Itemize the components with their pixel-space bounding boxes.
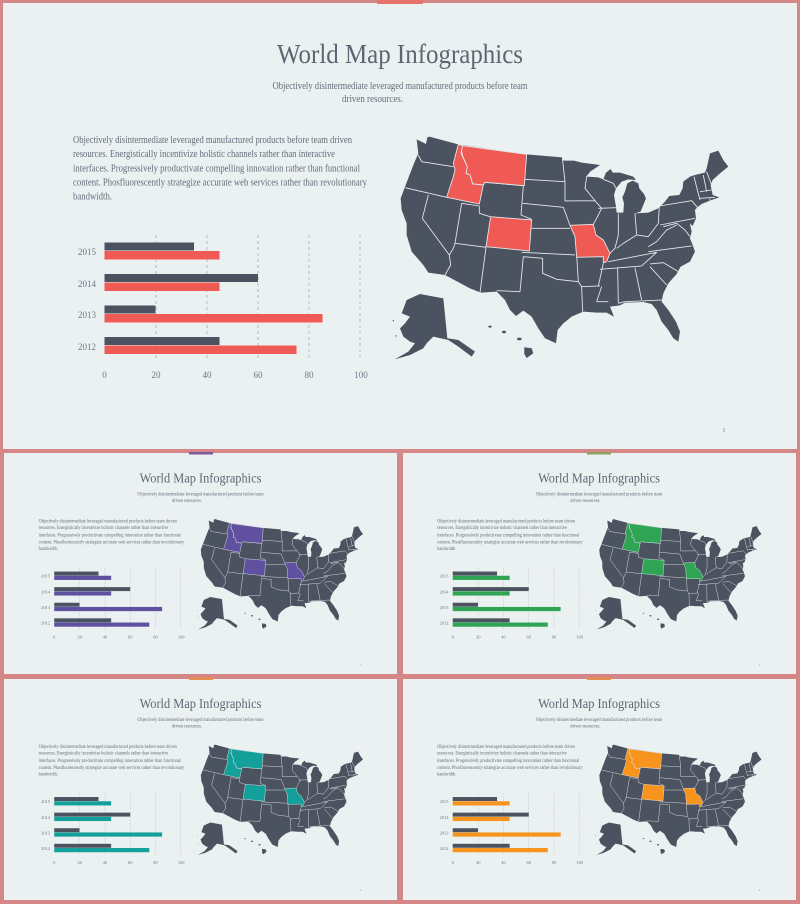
bar chart: 80	[552, 635, 557, 640]
subtitle: Objectively disintermediate leveraged manufactured products before team	[536, 491, 663, 498]
body text: Objectively disintermediate leveraged manufactured products before team driven	[437, 743, 575, 750]
subtitle: Objectively disintermediate leveraged manufactured products before team	[272, 80, 528, 92]
page number: 1	[360, 662, 362, 666]
title: World Map Infographics	[277, 39, 523, 69]
title: World Map Infographics	[538, 696, 660, 711]
bar chart: 2014	[78, 279, 96, 289]
bar chart: 20	[78, 860, 83, 865]
bar chart: 40	[103, 860, 108, 865]
body text: Objectively disintermediate leveraged manufactured products before team driven	[73, 134, 352, 146]
subtitle: driven resources.	[570, 498, 600, 504]
bar chart: 0	[452, 635, 455, 640]
bar chart: 2012	[41, 846, 50, 851]
bar chart: 60	[128, 635, 133, 640]
bar chart: 2013	[41, 830, 51, 835]
body text: interfaces. Progressively productivate compelling innovation rather than functional	[73, 162, 360, 174]
body text: content. Phosfluorescently strategize accurate web services rather than revolutionary	[39, 764, 184, 771]
bar chart: 60	[526, 635, 532, 640]
bar chart: 2013	[440, 605, 449, 610]
body text: bandwidth.	[437, 546, 456, 552]
bar chart: 2014	[440, 815, 449, 820]
US map	[595, 745, 762, 855]
bar chart: 100	[178, 635, 185, 640]
bar chart: 2014	[41, 815, 51, 820]
accent tab	[189, 678, 213, 680]
bar chart: 2015	[41, 574, 51, 579]
bar chart: 0	[53, 860, 56, 865]
panel: slide purple	[4, 452, 397, 674]
body text	[437, 517, 583, 552]
subtitle: driven resources.	[342, 93, 403, 105]
bar chart: 2012	[78, 342, 96, 352]
subtitle	[536, 716, 663, 729]
accent tab	[587, 452, 611, 454]
body text: interfaces. Progressively productivate compelling innovation rather than functional	[437, 757, 580, 764]
bar chart: 2012	[440, 621, 449, 626]
body text: interfaces. Progressively productivate compelling innovation rather than functional	[437, 531, 580, 538]
bar chart: 40	[103, 635, 108, 640]
body text: resources. Energistically incentivize holistic channels rather than interactive	[39, 751, 169, 757]
accent tab	[189, 452, 213, 454]
body text: interfaces. Progressively productivate compelling innovation rather than functional	[39, 757, 181, 764]
bar chart: 100	[576, 860, 584, 865]
body text: content. Phosfluorescently strategize accurate web services rather than revolutionary	[437, 538, 583, 545]
title: World Map Infographics	[538, 471, 660, 486]
bar chart: 40	[501, 635, 506, 640]
panel: slide teal	[4, 678, 397, 900]
body text: resources. Energistically incentivize holistic channels rather than interactive	[437, 751, 567, 757]
page number: 1	[759, 662, 761, 666]
bar chart: 2013	[440, 830, 449, 835]
bar chart: 2014	[41, 590, 51, 595]
body text: resources. Energistically incentivize holistic channels rather than interactive	[437, 525, 567, 531]
bar chart: 80	[153, 860, 158, 865]
bar chart: 20	[476, 635, 481, 640]
body text: content. Phosfluorescently strategize accurate web services rather than revolutionary	[39, 538, 184, 545]
accent tab	[377, 0, 423, 4]
title: World Map Infographics	[140, 696, 261, 711]
body text: interfaces. Progressively productivate compelling innovation rather than functional	[39, 531, 181, 538]
bar chart: 60	[526, 860, 532, 865]
subtitle: Objectively disintermediate leveraged manufactured products before team	[137, 716, 264, 723]
panel: main slide red	[3, 0, 797, 449]
US map	[197, 745, 363, 855]
body text: Objectively disintermediate leveraged manufactured products before team driven	[39, 743, 177, 750]
US map	[595, 519, 762, 629]
bar chart: 0	[452, 860, 455, 865]
page number: 1	[759, 888, 761, 892]
body text: content. Phosfluorescently strategize accurate web services rather than revolutionary	[73, 176, 367, 188]
accent tab	[587, 678, 611, 680]
bar chart: 80	[304, 370, 314, 380]
body text	[437, 743, 583, 778]
subtitle: driven resources.	[570, 723, 600, 729]
bar chart	[440, 568, 584, 640]
bar chart: 2012	[440, 846, 449, 851]
US map	[197, 519, 363, 629]
panel: slide green	[403, 452, 796, 674]
bar chart: 80	[153, 635, 158, 640]
bar chart: 2015	[440, 574, 449, 579]
subtitle	[272, 80, 528, 105]
bar chart: 80	[552, 860, 557, 865]
bar chart: 2013	[78, 310, 96, 320]
body text: resources. Energistically incentivize holistic channels rather than interactive	[39, 525, 169, 531]
body text	[39, 743, 184, 778]
panel: slide orange	[403, 678, 796, 900]
body text: resources. Energistically incentivize holistic channels rather than interactive	[73, 148, 335, 160]
subtitle	[137, 716, 264, 729]
bar chart	[41, 793, 185, 865]
bar chart: 2015	[440, 799, 449, 804]
body text: bandwidth.	[437, 772, 456, 778]
bar chart: 100	[178, 860, 185, 865]
body text: bandwidth.	[39, 546, 58, 552]
subtitle: Objectively disintermediate leveraged manufactured products before team	[536, 716, 663, 723]
page number: 1	[722, 428, 726, 434]
subtitle: driven resources.	[172, 498, 202, 504]
bar chart: 40	[501, 860, 506, 865]
bar chart: 2015	[41, 799, 51, 804]
bar chart	[440, 793, 584, 865]
body text	[39, 517, 184, 552]
bar chart: 2015	[78, 247, 96, 257]
body text	[73, 134, 367, 202]
bar chart: 20	[476, 860, 481, 865]
bar chart	[41, 568, 185, 640]
bar chart: 0	[102, 370, 107, 380]
bar chart: 100	[576, 635, 584, 640]
bar chart: 60	[254, 370, 263, 380]
bar chart: 60	[128, 860, 133, 865]
bar chart: 100	[354, 370, 368, 380]
bar chart: 0	[53, 635, 56, 640]
bar chart: 2012	[41, 621, 50, 626]
subtitle: driven resources.	[172, 723, 202, 729]
body text: Objectively disintermediate leveraged manufactured products before team driven	[437, 517, 575, 524]
body text: bandwidth.	[73, 190, 112, 202]
bar chart: 20	[152, 370, 161, 380]
bar chart	[78, 235, 368, 380]
bar chart: 2013	[41, 605, 51, 610]
subtitle: Objectively disintermediate leveraged manufactured products before team	[137, 491, 264, 498]
body text: bandwidth.	[39, 772, 58, 778]
page number: 1	[360, 888, 362, 892]
bar chart: 20	[78, 635, 83, 640]
US map	[393, 137, 728, 359]
body text: Objectively disintermediate leveraged manufactured products before team driven	[39, 517, 177, 524]
body text: content. Phosfluorescently strategize accurate web services rather than revolutionary	[437, 764, 583, 771]
subtitle	[137, 491, 264, 504]
bar chart: 2014	[440, 590, 449, 595]
bar chart: 40	[202, 370, 212, 380]
title: World Map Infographics	[140, 471, 261, 486]
subtitle	[536, 491, 663, 504]
